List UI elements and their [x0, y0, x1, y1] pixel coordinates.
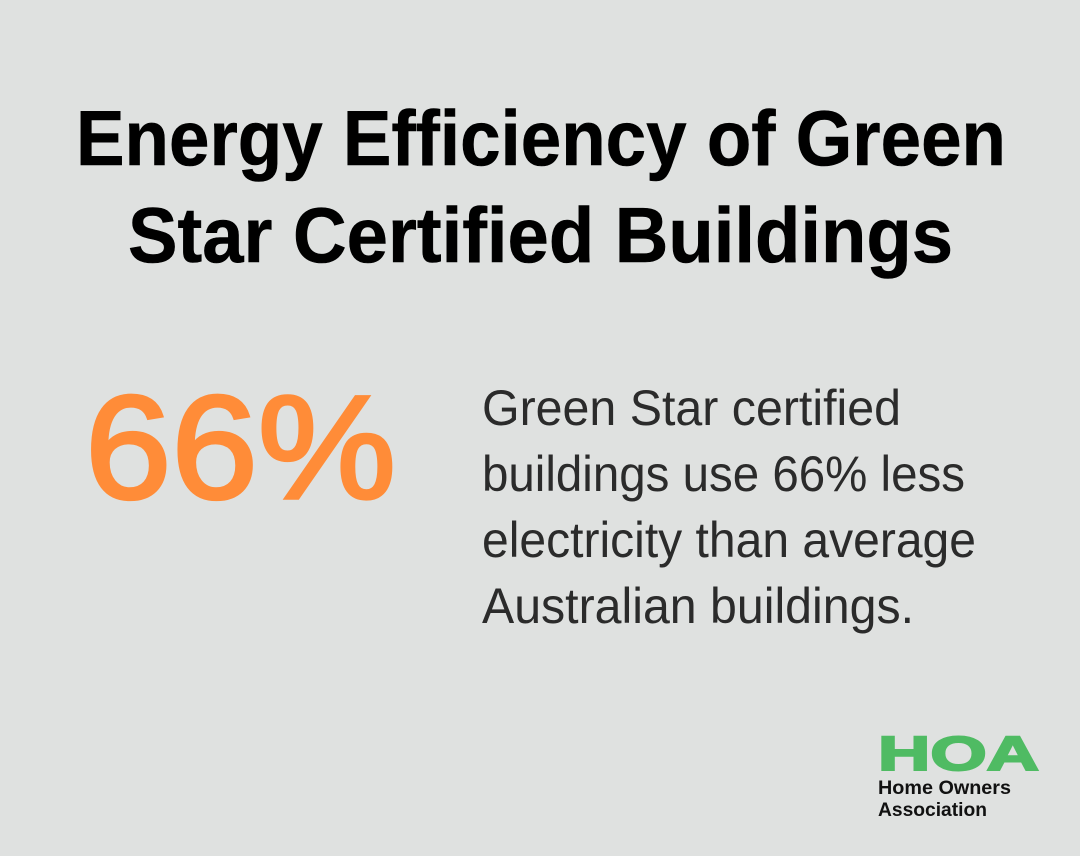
statistic: 66%: 66% [85, 366, 396, 530]
logo caption [878, 778, 1011, 821]
title [76, 94, 1006, 279]
description text: buildings use 66% less [482, 446, 965, 502]
logo caption: Home Owners [878, 778, 1011, 799]
description text [482, 380, 976, 634]
description text: electricity than average [482, 512, 976, 568]
logo caption: Association [878, 800, 987, 821]
logo wordmark: HOA: HOA [878, 728, 1039, 781]
description text: Australian buildings. [482, 578, 914, 634]
description text: Green Star certified [482, 380, 901, 436]
logo: Home Owners Association [878, 728, 1039, 821]
title: Star Certified Buildings [128, 191, 953, 279]
title: Energy Efficiency of Green [76, 94, 1006, 182]
